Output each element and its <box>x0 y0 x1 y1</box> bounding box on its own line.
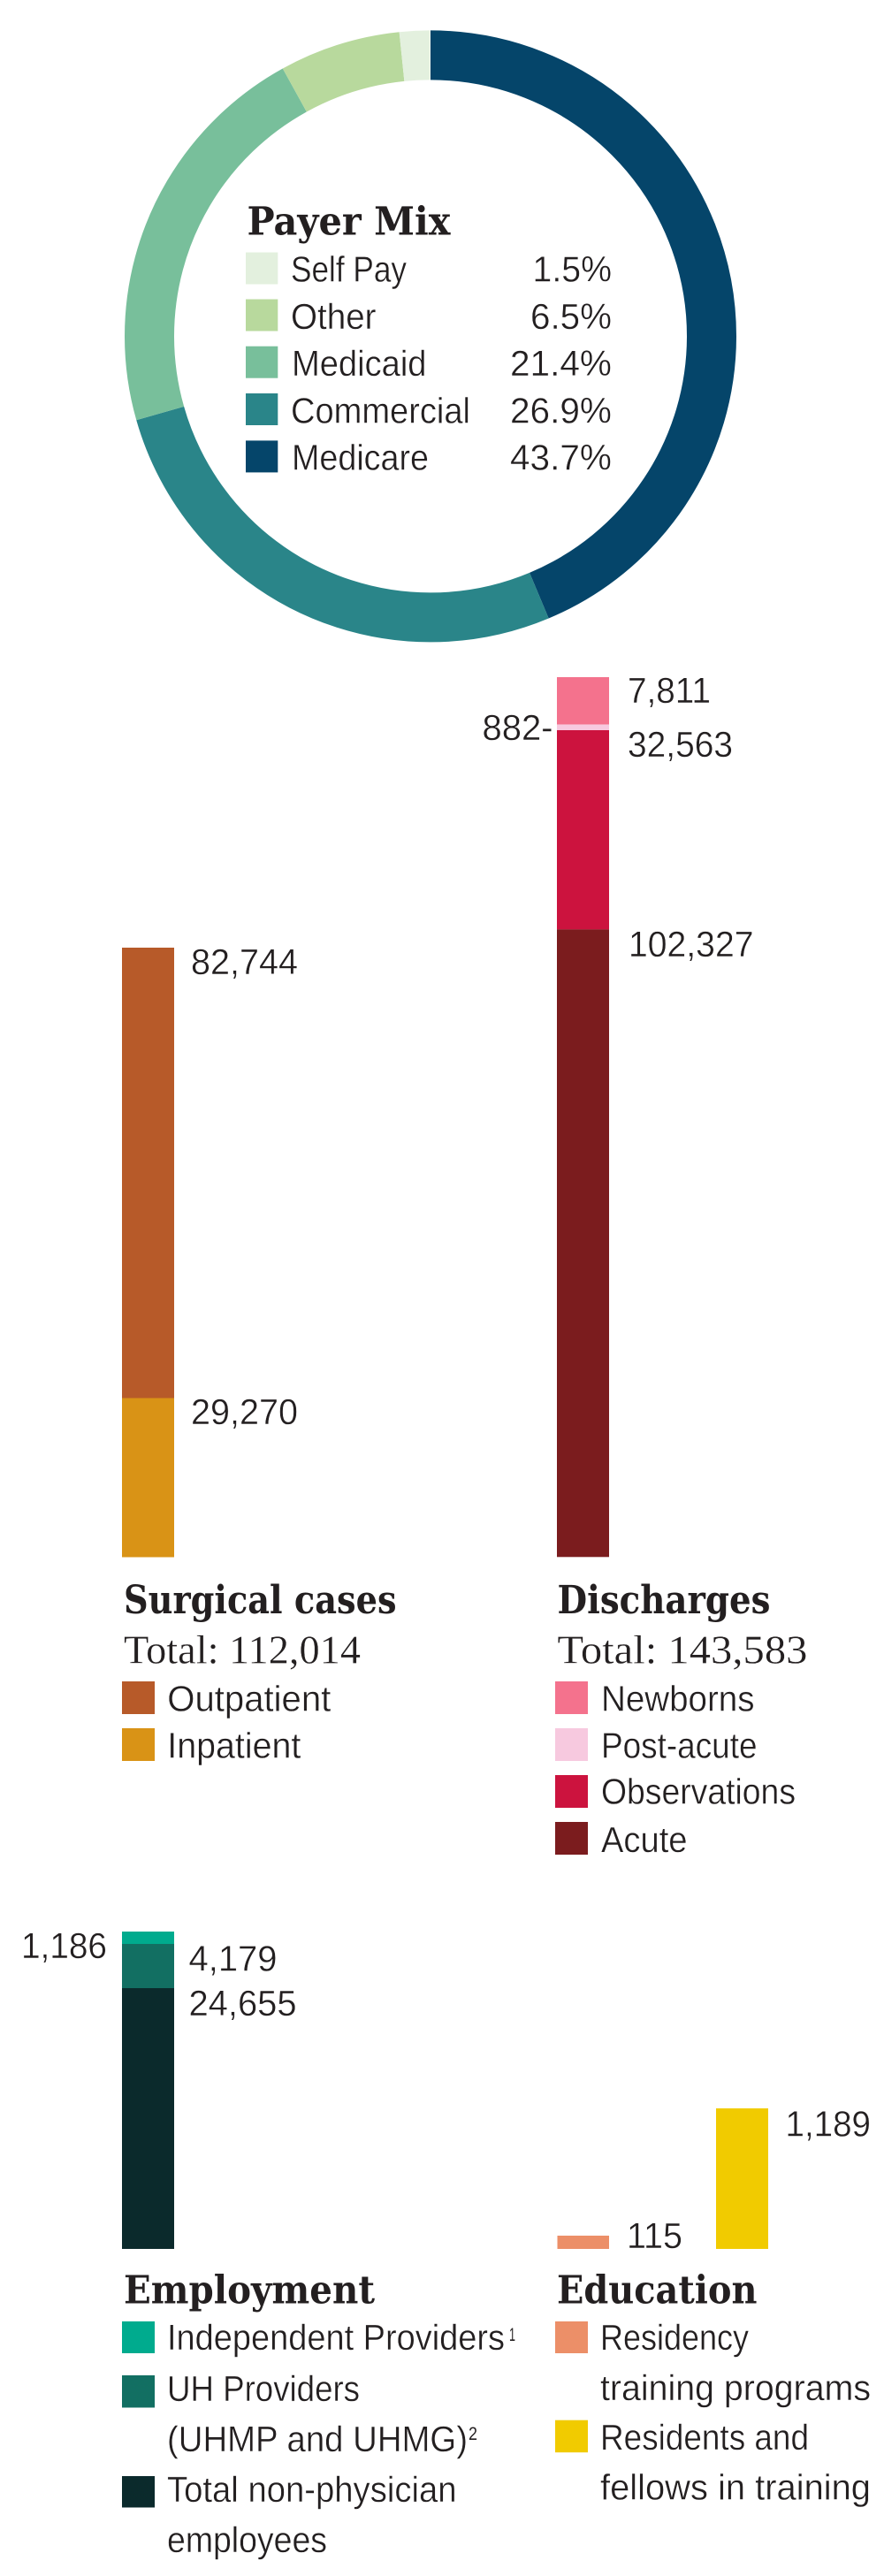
legend: post-acute: Post-acute <box>601 1725 757 1765</box>
legend: uh providers: 2 <box>469 2424 477 2444</box>
legend: self pay <box>246 249 612 290</box>
total: discharges: Total: 143,583 <box>557 1627 808 1673</box>
value: outpatient: 82,744 <box>191 941 298 982</box>
legend: self pay: Self Pay <box>291 249 407 290</box>
panel: education <box>555 2103 871 2508</box>
legend: observations: Observations <box>601 1772 796 1812</box>
legend: other: Other <box>291 296 377 337</box>
panel: discharges <box>483 670 808 1860</box>
donut chart: payer mix <box>149 55 712 617</box>
value: residents and fellows: 1,189 <box>785 2103 871 2144</box>
legend: independent providers: 1 <box>509 2325 515 2345</box>
legend: residency training programs: training programs <box>600 2367 871 2408</box>
legend: uh providers: (UHMP and UHMG) <box>167 2419 468 2459</box>
legend: total non-physician employees: employees <box>167 2519 327 2560</box>
bar: surgical cases <box>122 948 174 1558</box>
legend: total non-physician employees: Total non-physician <box>167 2469 456 2510</box>
legend: self pay: 1.5% <box>532 249 612 290</box>
legend: residents and fellows in training: fellows in training <box>600 2467 871 2508</box>
value: newborns: 7,811 <box>628 670 711 711</box>
heading: employment: Employment <box>124 2267 376 2313</box>
value: residency training programs: 115 <box>627 2215 682 2256</box>
legend: commercial: 26.9% <box>510 390 612 431</box>
legend: total non-physician employees <box>122 2469 456 2560</box>
panel: employment <box>21 1925 515 2560</box>
legend: independent providers: Independent Providers <box>167 2317 505 2358</box>
heading: discharges: Discharges <box>557 1578 771 1623</box>
value: inpatient: 29,270 <box>191 1391 298 1432</box>
bar: residents and fellows <box>716 2108 768 2249</box>
total: surgical cases: Total: 112,014 <box>124 1627 361 1673</box>
value: uh providers: 4,179 <box>189 1938 278 1978</box>
legend: inpatient: Inpatient <box>167 1725 301 1765</box>
legend: residents and fellows in training: Residents and <box>600 2417 809 2458</box>
value: post-acute: 882- <box>483 707 553 748</box>
heading: payer mix: Payer Mix <box>248 200 451 244</box>
panel: surgical cases <box>122 941 396 1765</box>
legend: uh providers <box>122 2368 477 2459</box>
value: acute: 102,327 <box>629 924 753 964</box>
legend: acute: Acute <box>601 1819 688 1860</box>
legend: residency training programs: Residency <box>600 2317 749 2358</box>
legend: medicare: 43.7% <box>510 438 612 478</box>
legend: other <box>246 296 612 337</box>
value: non-physician employees: 24,655 <box>189 1983 297 2023</box>
legend: commercial: Commercial <box>291 390 470 431</box>
bar: discharges <box>557 677 609 1557</box>
value: independent providers: 1,186 <box>21 1925 107 1966</box>
legend: residents and fellows in training <box>555 2417 871 2508</box>
legend: medicaid <box>246 343 612 384</box>
bar: residency training programs <box>557 2236 609 2249</box>
heading: surgical cases: Surgical cases <box>124 1578 396 1623</box>
bar: employment <box>122 1932 174 2249</box>
legend: medicaid: Medicaid <box>292 343 426 384</box>
legend: medicare <box>246 438 612 478</box>
legend: medicare: Medicare <box>292 438 429 478</box>
legend: uh providers: UH Providers <box>167 2368 360 2409</box>
panel: payer mix <box>149 55 712 617</box>
legend: other: 6.5% <box>530 296 612 337</box>
legend: commercial <box>246 390 612 431</box>
legend: acute <box>555 1819 688 1860</box>
heading: education: Education <box>557 2267 757 2313</box>
legend: newborns: Newborns <box>601 1678 755 1719</box>
value: observations: 32,563 <box>628 724 733 765</box>
legend: medicaid: 21.4% <box>510 343 612 384</box>
legend: outpatient: Outpatient <box>167 1678 332 1719</box>
legend: residency training programs <box>555 2317 871 2408</box>
